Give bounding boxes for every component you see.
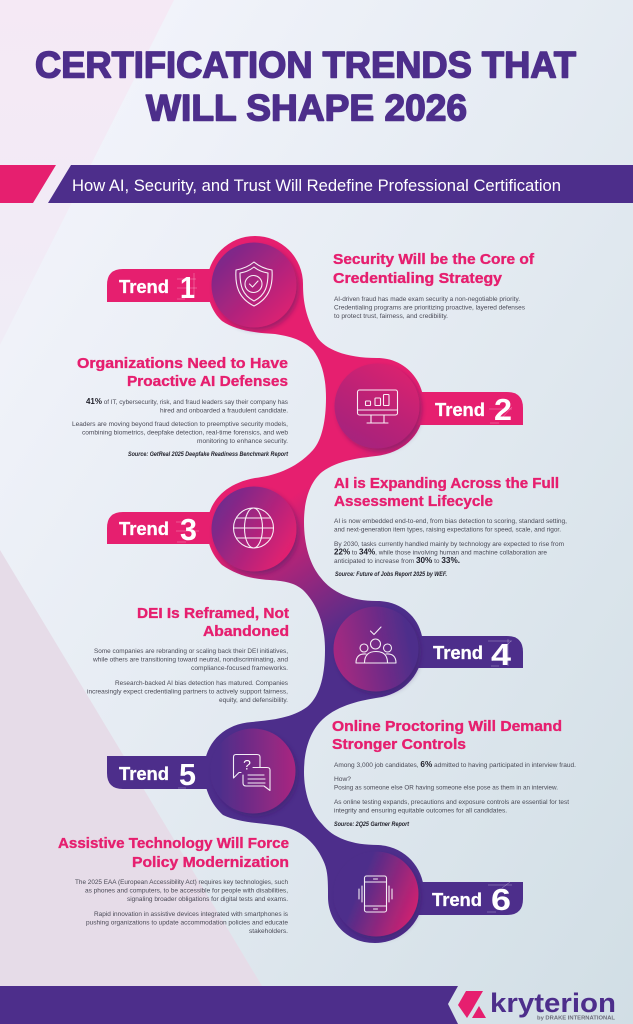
body text: Research-backed AI bias detection has matured. Companies [115, 680, 289, 687]
source: Source: Future of Jobs Report 2025 by WEF. [335, 572, 447, 578]
heading: Stronger Controls [332, 737, 466, 753]
body text: anticipated to increase from 30% to 33%. [334, 555, 460, 565]
trend 6 badge: 6 [491, 882, 511, 917]
body text: while others are transitioning toward neutral, nondiscriminating, and [92, 656, 288, 664]
body text: Posing as someone else OR having someone else pose as them in an interview. [334, 784, 558, 792]
heading: Policy Modernization [132, 855, 289, 871]
trend 1 badge: 1 [180, 270, 195, 305]
trend ribbon [204, 236, 424, 943]
subtitle banner: How AI, Security, and Trust Will Redefine Professional Certification [72, 177, 561, 195]
body text: equity, and defensibility. [219, 697, 288, 704]
trend 3 badge [107, 512, 225, 547]
body text [75, 879, 289, 935]
source: Source: 2Q25 Gartner Report [334, 822, 410, 828]
section: online proctoring [332, 719, 576, 828]
heading [333, 252, 534, 287]
title [35, 44, 576, 128]
trend 2 badge [405, 392, 523, 427]
kryterion logo [458, 988, 616, 1022]
body text: Credentialing programs are prioritizing proactive, layered defenses [334, 304, 526, 312]
body text: AI is now embedded end-to-end, from bias detection to scoring, standard setting, [334, 518, 567, 525]
trend 6 badge [405, 882, 523, 917]
heading [332, 719, 562, 753]
trend 5 circle with chat icon: ? [243, 756, 251, 772]
trend 2 badge: Trend [435, 399, 485, 420]
section: security core [333, 252, 534, 320]
kryterion logo: kryterion [490, 988, 616, 1018]
heading: Online Proctoring Will Demand [332, 719, 562, 735]
trend 1 badge [107, 269, 225, 305]
body text: 22% to 34%, while those involving human and machine collaboration are [334, 546, 547, 556]
title: WILL SHAPE 2026 [146, 88, 467, 128]
body text: and next-generation item types, raising expectations for speed, scale, and rigor. [334, 526, 561, 534]
body text: As online testing expands, precautions and exposure controls are essential for test [334, 799, 569, 806]
heading: Abandoned [203, 624, 289, 640]
heading [77, 356, 288, 390]
trend 4 badge [405, 636, 523, 672]
body text: increasingly expect credentialing partners to actively support fairness, [87, 688, 288, 696]
heading: Credentialing Strategy [333, 271, 503, 287]
body text [334, 296, 526, 320]
body text: Among 3,000 job candidates, 6% admitted to having participated in interview fraud. [334, 759, 576, 769]
body text: compliance-focused frameworks. [191, 665, 288, 672]
body text [334, 518, 567, 565]
trend 3 circle with globe icon [212, 486, 296, 572]
body text: stakeholders. [249, 928, 288, 935]
section: proactive AI defenses [72, 356, 289, 458]
footer band [0, 986, 458, 1024]
body text: combining biometrics, deepfake detection, real-time forensics, and web [82, 430, 288, 436]
trend 1 badge: Trend [119, 276, 169, 297]
body text: as phones and computers, to be accessible for people with disabilities, [85, 888, 288, 894]
heading [334, 476, 559, 510]
body text: to protect trust, fairness, and credibility. [334, 313, 448, 320]
trend 5 badge [107, 756, 225, 792]
heading: Security Will be the Core of [333, 252, 534, 268]
body text: signaling broader obligations for digital tests and exams. [127, 896, 288, 903]
trend 2 badge: 2 [494, 392, 512, 427]
heading: Organizations Need to Have [77, 356, 288, 372]
trend 6 badge: Trend [432, 889, 482, 910]
heading: Assessment Lifecycle [334, 494, 493, 510]
body text: AI-driven fraud has made exam security a non-negotiable priority. [334, 296, 520, 303]
body text [334, 759, 576, 814]
body text: hired and onboarded a fraudulent candidate. [160, 408, 288, 414]
source: Source: GetReal 2025 Deepfake Readiness Benchmark Report [128, 452, 289, 458]
trend 3 badge: Trend [119, 518, 169, 539]
trend 3 badge: 3 [180, 512, 197, 547]
heading: Assistive Technology Will Force [58, 836, 289, 852]
body text [87, 648, 289, 704]
trend 4 circle with people icon [334, 606, 418, 692]
body text: By 2030, tasks currently handled mainly by technology are expected to rise from [334, 541, 564, 548]
section: assistive technology [58, 836, 289, 935]
body text: 41% of IT, cybersecurity, risk, and fraud leaders say their company has [86, 396, 289, 406]
heading [137, 606, 289, 640]
body text [72, 396, 289, 445]
body text: pushing organizations to update accommodation policies and educate [86, 920, 288, 926]
trend 5 badge: 5 [179, 757, 196, 792]
body text: How? [334, 776, 351, 783]
body text: Rapid innovation in assistive devices integrated with smartphones is [94, 911, 289, 918]
trend 5 circle with chat icon [210, 728, 296, 814]
body text: integrity and ensuring equitable outcomes for all candidates. [334, 808, 507, 814]
body text: Leaders are moving beyond fraud detection to preemptive security models, [72, 421, 288, 428]
body text: The 2025 EAA (European Accessibility Act) requires key technologies, such [75, 879, 288, 886]
kryterion logo: by DRAKE INTERNATIONAL [537, 1016, 615, 1022]
section: AI across lifecycle [334, 476, 567, 578]
body text: monitoring to enhance security. [197, 438, 288, 445]
trend 5 badge: Trend [119, 763, 169, 784]
trend 4 badge: 4 [491, 637, 512, 672]
trend 1 circle with shield icon [212, 242, 296, 328]
subtitle banner [0, 165, 633, 203]
title: CERTIFICATION TRENDS THAT [35, 44, 576, 86]
section: DEI reframed [87, 606, 289, 704]
heading: DEI Is Reframed, Not [137, 606, 289, 622]
heading: AI is Expanding Across the Full [334, 476, 559, 492]
trend 4 badge: Trend [433, 642, 483, 663]
body text: Some companies are rebranding or scaling back their DEI initiatives, [94, 648, 288, 655]
heading [58, 836, 289, 871]
trend 2 circle with monitor icon [334, 364, 420, 448]
trend 6 circle with phone icon [334, 852, 418, 936]
heading: Proactive AI Defenses [127, 374, 288, 390]
